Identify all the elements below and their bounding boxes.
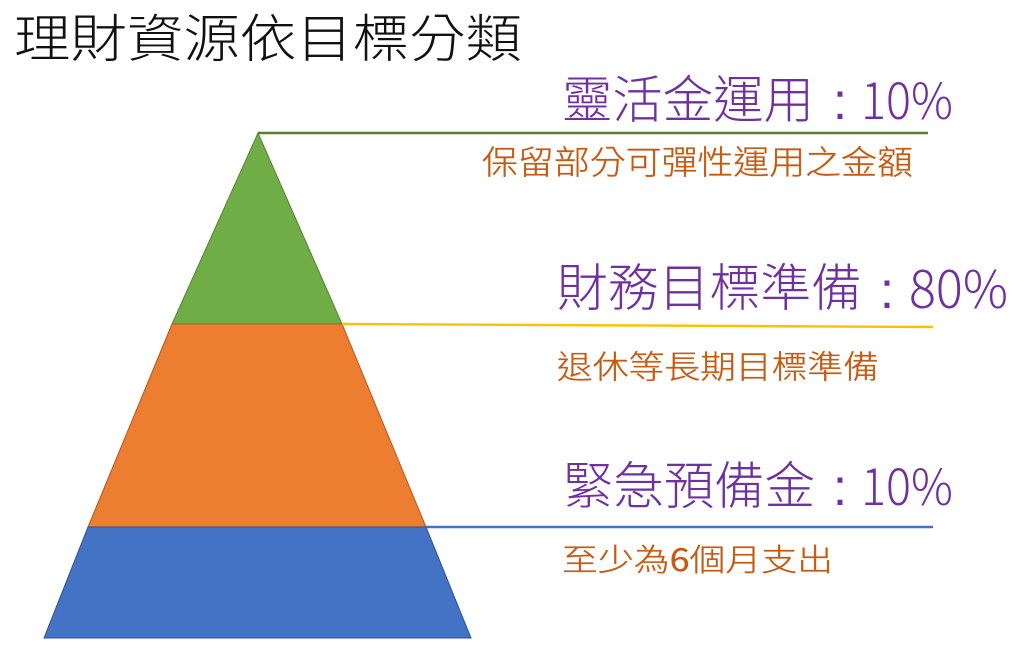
label: financial goals heading: : — [880, 262, 894, 320]
leader line: yellow — [342, 324, 933, 327]
label: financial goals heading: 財務目標準備 — [557, 247, 862, 321]
label: flexible funds description: 保留部分可彈性運用之金額 — [482, 136, 913, 184]
label: flexible funds heading: 靈活金運用 — [562, 59, 814, 133]
label: financial goals heading: 80% — [909, 248, 1008, 323]
leader line: green — [258, 132, 928, 134]
pyramid tier: top green — [172, 133, 342, 324]
label: flexible funds heading: 10% — [861, 62, 953, 134]
leader line: blue — [426, 526, 933, 528]
label: financial goals description: 退休等長期目標準備 — [557, 342, 879, 388]
pyramid tier: bottom blue — [44, 527, 471, 638]
label: emergency fund description: 至少為 6個月支出 — [562, 535, 833, 580]
label: financial goals heading — [557, 247, 1008, 323]
label: emergency fund heading: 緊急預備金 — [563, 445, 815, 519]
pyramid tier: middle orange — [88, 324, 426, 527]
pyramid chart — [44, 133, 471, 638]
label: emergency fund heading: : — [833, 459, 847, 517]
label: flexible funds heading — [562, 59, 953, 134]
label: emergency fund heading: 10% — [861, 448, 953, 520]
label: emergency fund heading — [563, 445, 953, 520]
label: flexible funds heading: : — [833, 73, 847, 131]
